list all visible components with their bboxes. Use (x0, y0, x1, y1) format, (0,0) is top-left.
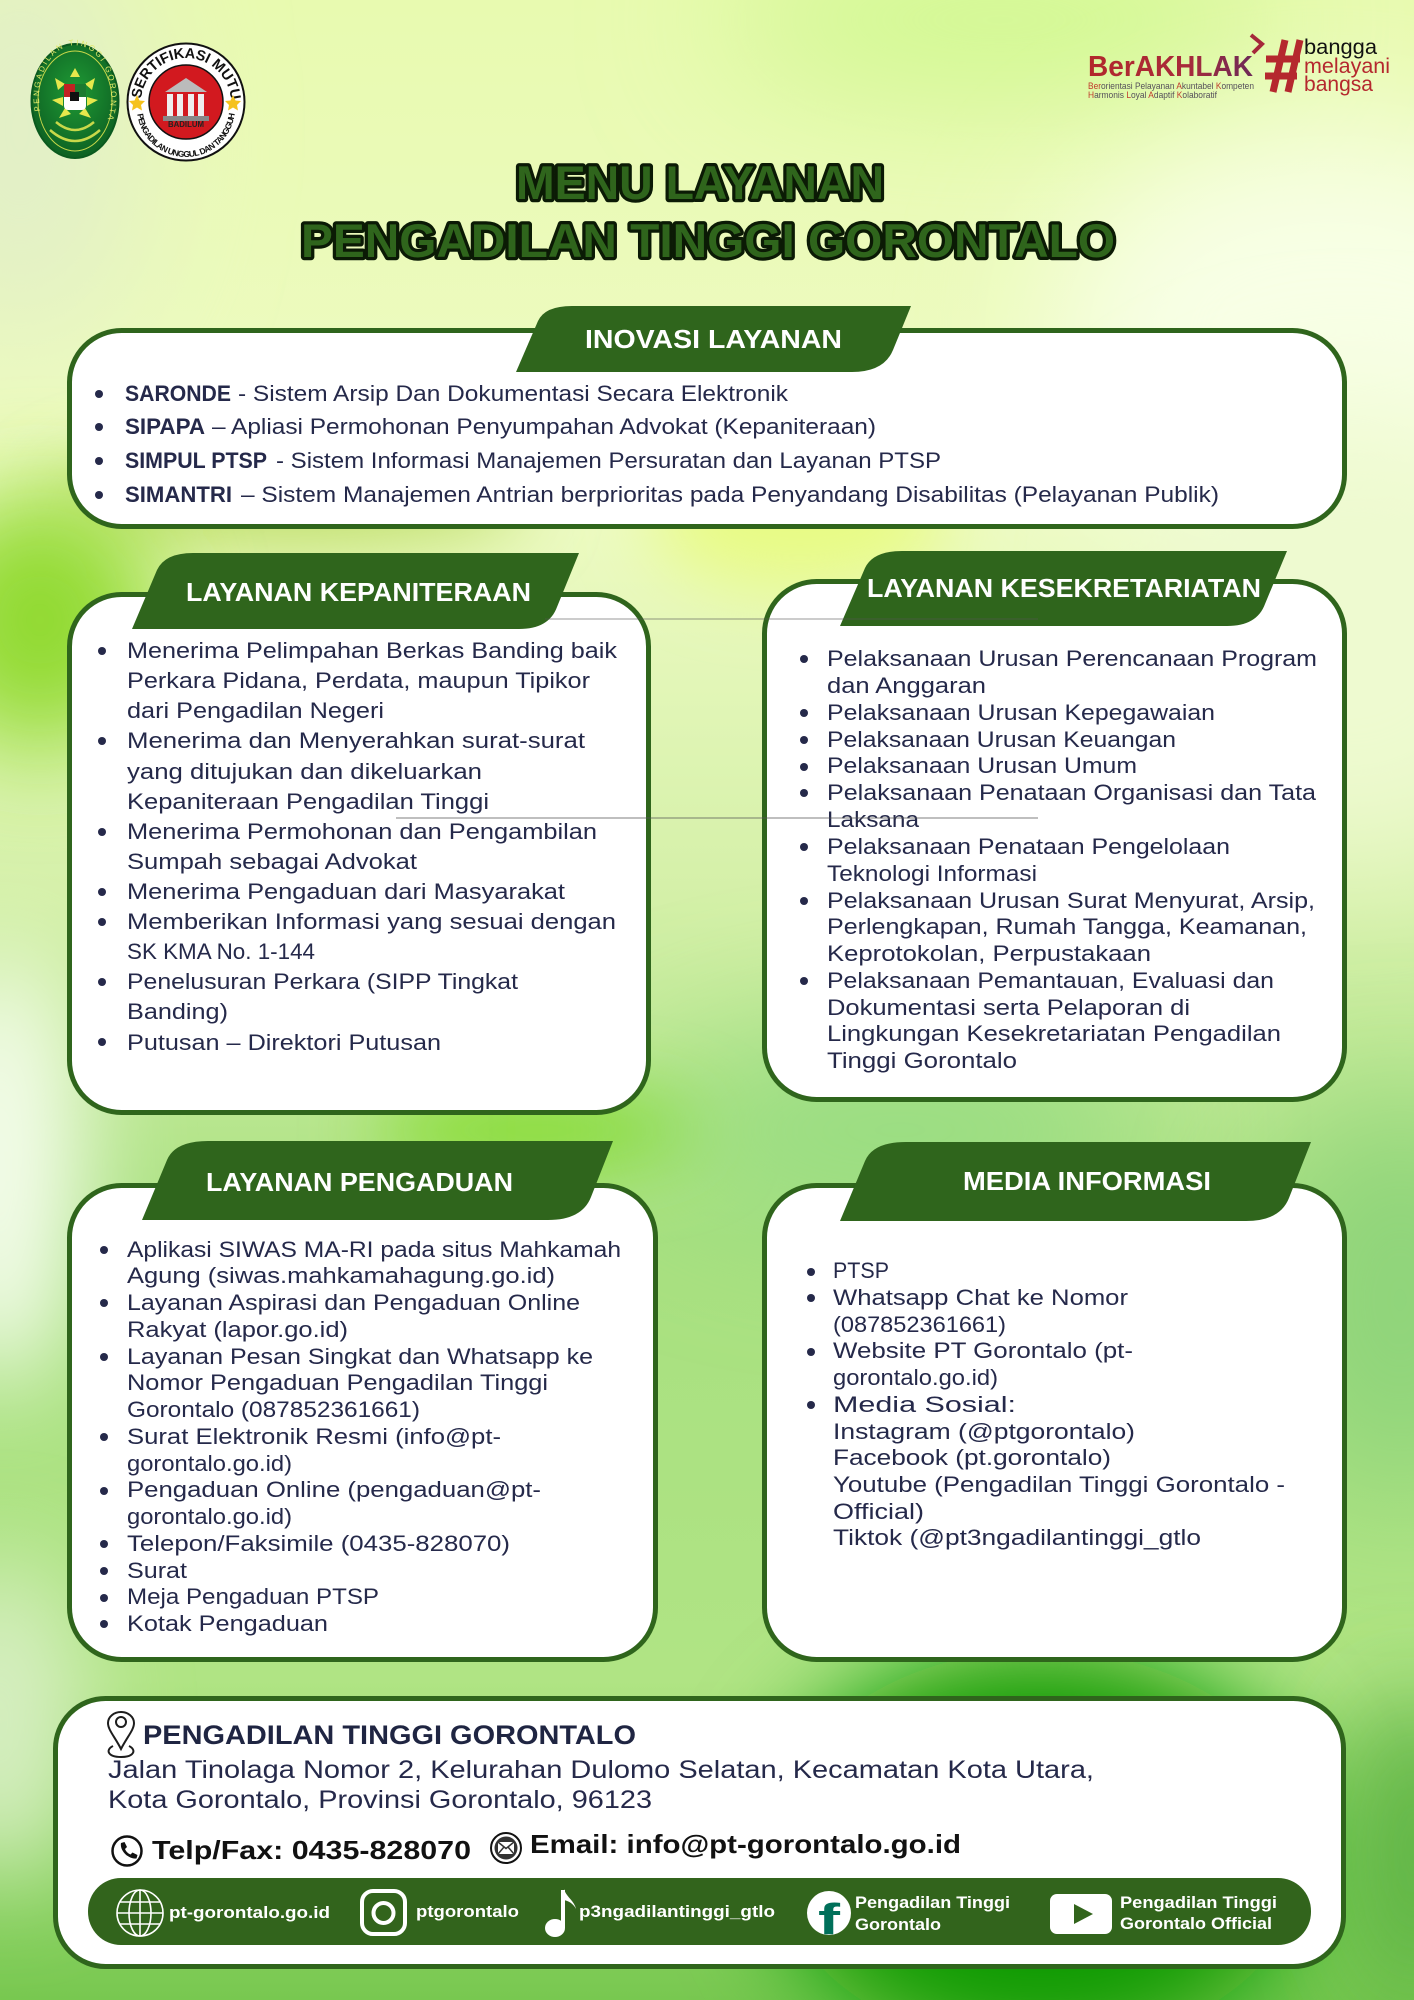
label: facebook (855, 1893, 1010, 1934)
title (301, 156, 1115, 267)
title: MENU LAYANAN (516, 156, 884, 209)
panel: contact footer (56, 1698, 1344, 1966)
list: pengaduan items: gorontalo.go.id) (127, 1504, 292, 1529)
icon: facebook: f (818, 1895, 841, 1944)
logo: Sertifikasi Mutu badge: PENGADILAN UNGGUL DAN TANGGUH (137, 113, 235, 157)
list: kepaniteraan items: Menerima Permohonan dan Pengambilan (127, 819, 597, 844)
logo: Sertifikasi Mutu badge (126, 42, 246, 162)
list: inovasi items: SARONDE (125, 381, 231, 406)
icon: location pin (108, 1712, 134, 1757)
label: youtube: Gorontalo Official (1120, 1914, 1272, 1933)
logo: Pengadilan Tinggi Gorontalo emblem (30, 40, 120, 159)
list: pengaduan items: Nomor Pengaduan Pengadilan Tinggi (127, 1370, 548, 1395)
list: pengaduan items: Agung (siwas.mahkamahagung.go.id) (127, 1263, 555, 1288)
text: address (108, 1756, 1094, 1814)
list: kepaniteraan items: Kepaniteraan Pengadilan Tinggi (127, 789, 489, 814)
tab: layanan kepaniteraan heading (132, 553, 579, 629)
list: pengaduan items: Layanan Pesan Singkat dan Whatsapp ke (127, 1344, 593, 1369)
list: kepaniteraan items: Penelusuran Perkara (SIPP Tingkat (127, 969, 519, 994)
list: kesekretariatan items: Pelaksanaan Urusan Kepegawaian (827, 700, 1215, 725)
icon: email (491, 1833, 521, 1863)
list: pengaduan items: Kotak Pengaduan (127, 1611, 328, 1636)
list: inovasi items: – Sistem Manajemen Antrian berprioritas pada Penyandang Disabilitas (Pelayanan Publik) (241, 482, 1219, 507)
logo: BerAKHLAK bangga melayani bangsa: melayani (1304, 55, 1390, 78)
list: kepaniteraan items: Sumpah sebagai Advokat (127, 849, 418, 874)
logo: BerAKHLAK bangga melayani bangsa: Berorientasi Pelayanan Akuntabel Kompeten (1088, 81, 1254, 92)
list: kepaniteraan items: Banding) (127, 999, 228, 1024)
list: kesekretariatan items: dan Anggaran (827, 673, 986, 698)
list: kepaniteraan items: dari Pengadilan Negeri (127, 698, 384, 723)
list: inovasi items: SIMPUL PTSP (125, 448, 267, 473)
label: tiktok: p3ngadilantinggi_gtlo (579, 1902, 775, 1921)
list: kesekretariatan items: Pelaksanaan Urusan Perencanaan Program (827, 646, 1317, 671)
list: media informasi items: Official) (833, 1499, 924, 1524)
list: pengaduan items (100, 1237, 621, 1636)
panel: layanan pengaduan (70, 1141, 656, 1660)
list: kesekretariatan items: Pelaksanaan Pemantauan, Evaluasi dan (827, 968, 1274, 993)
list: kepaniteraan items: Memberikan Informasi yang sesuai dengan (127, 909, 616, 934)
list: kepaniteraan items: SK KMA No. 1-144 (127, 939, 315, 964)
tab: layanan kepaniteraan heading: LAYANAN KEPANITERAAN (186, 579, 531, 607)
list: kesekretariatan items: Pelaksanaan Penataan Pengelolaan (827, 834, 1230, 859)
list: kesekretariatan items: Dokumentasi serta Pelaporan di (827, 995, 1190, 1020)
list: kepaniteraan items: Perkara Pidana, Perdata, maupun Tipikor (127, 668, 591, 693)
list: inovasi items: SIPAPA (125, 414, 205, 439)
list: kepaniteraan items: Putusan – Direktori Putusan (127, 1030, 441, 1055)
logo: BerAKHLAK bangga melayani bangsa: bangga (1304, 36, 1377, 59)
list: kesekretariatan items: Perlengkapan, Rumah Tangga, Keamanan, (827, 914, 1307, 939)
icon: instagram (362, 1891, 405, 1934)
list: pengaduan items: Telepon/Faksimile (0435-828070) (127, 1531, 510, 1556)
logo: BerAKHLAK bangga melayani bangsa: Harmonis Loyal Adaptif Kolaboratif (1088, 90, 1217, 101)
icon: facebook (807, 1891, 851, 1944)
list: inovasi items: SIMANTRI (125, 482, 232, 507)
logo: BerAKHLAK bangga melayani bangsa: BerAKHLAK (1088, 51, 1253, 83)
panel: layanan kepaniteraan (70, 553, 648, 1112)
list: kesekretariatan items: Laksana (827, 807, 920, 832)
list: media informasi items: Whatsapp Chat ke Nomor (833, 1285, 1129, 1310)
panel: media informasi (764, 1142, 1344, 1660)
logo: BerAKHLAK bangga melayani bangsa (1088, 35, 1390, 101)
icon: phone (112, 1836, 142, 1866)
list: media informasi items: Website PT Gorontalo (pt- (833, 1338, 1133, 1363)
text: address: Jalan Tinolaga Nomor 2, Kelurahan Dulomo Selatan, Kecamatan Kota Utara, (108, 1756, 1094, 1784)
list: inovasi items: - Sistem Arsip Dan Dokumentasi Secara Elektronik (238, 381, 789, 406)
icon: tiktok note (545, 1889, 576, 1937)
list: pengaduan items: Pengaduan Online (pengaduan@pt- (127, 1477, 541, 1502)
list: pengaduan items: gorontalo.go.id) (127, 1451, 292, 1476)
logo: Sertifikasi Mutu badge: BADILUM (168, 120, 204, 129)
list: media informasi items (807, 1258, 1285, 1550)
list: kepaniteraan items: Menerima Pengaduan dari Masyarakat (127, 879, 566, 904)
list: media informasi items: Tiktok (@pt3ngadilantinggi_gtlo (833, 1525, 1201, 1550)
list: media informasi items: Youtube (Pengadilan Tinggi Gorontalo - (833, 1472, 1285, 1497)
text: email: Email: info@pt-gorontalo.go.id (530, 1829, 961, 1859)
social media bar (88, 1878, 1311, 1945)
panel: layanan kesekretariatan (764, 551, 1344, 1100)
list: pengaduan items: Surat (127, 1558, 188, 1583)
label: youtube (1120, 1893, 1277, 1933)
list: media informasi items: Instagram (@ptgorontalo) (833, 1419, 1135, 1444)
logo: BerAKHLAK bangga melayani bangsa: bangsa (1304, 73, 1373, 96)
list: media informasi items: Media Sosial: (833, 1392, 1016, 1417)
list: kesekretariatan items: Pelaksanaan Penataan Organisasi dan Tata (827, 780, 1317, 805)
list: kesekretariatan items: Pelaksanaan Urusan Umum (827, 753, 1137, 778)
list: kesekretariatan items: Keprotokolan, Perpustakaan (827, 941, 1151, 966)
tab: layanan kesekretariatan heading: LAYANAN KESEKRETARIATAN (867, 575, 1261, 603)
icon: globe (117, 1890, 163, 1936)
list: media informasi items: PTSP (833, 1258, 889, 1283)
list: kesekretariatan items: Tinggi Gorontalo (827, 1048, 1017, 1073)
list: inovasi items: – Apliasi Permohonan Penyumpahan Advokat (Kepaniteraan) (212, 414, 876, 439)
list: kepaniteraan items: Menerima dan Menyerahkan surat-surat (127, 728, 586, 753)
tab: inovasi layanan heading (516, 306, 911, 372)
list: pengaduan items: Surat Elektronik Resmi (info@pt- (127, 1424, 501, 1449)
list: pengaduan items: Rakyat (lapor.go.id) (127, 1317, 348, 1342)
list: inovasi items (95, 381, 1219, 507)
icon: youtube (1050, 1894, 1112, 1934)
list: media informasi items: gorontalo.go.id) (833, 1365, 998, 1390)
tab: media informasi heading: MEDIA INFORMASI (963, 1168, 1211, 1196)
panel: inovasi layanan (70, 306, 1344, 526)
label: facebook: Gorontalo (855, 1915, 941, 1934)
list: pengaduan items: Aplikasi SIWAS MA-RI pada situs Mahkamah (127, 1237, 621, 1262)
text: address: Kota Gorontalo, Provinsi Gorontalo, 96123 (108, 1786, 652, 1814)
list: pengaduan items: Meja Pengaduan PTSP (127, 1584, 379, 1609)
label: website: pt-gorontalo.go.id (169, 1903, 330, 1922)
list: media informasi items: Facebook (pt.gorontalo) (833, 1445, 1111, 1470)
heading: court name: PENGADILAN TINGGI GORONTALO (143, 1720, 636, 1750)
list: kesekretariatan items (800, 646, 1317, 1073)
tab: media informasi heading (840, 1142, 1311, 1221)
list: kepaniteraan items: yang ditujukan dan dikeluarkan (127, 759, 482, 784)
tab: inovasi layanan heading: INOVASI LAYANAN (585, 326, 842, 354)
list: pengaduan items: Gorontalo (087852361661) (127, 1397, 420, 1422)
logo: Sertifikasi Mutu badge: SERTIFIKASI MUTU (132, 48, 241, 99)
list: kepaniteraan items (98, 638, 618, 1055)
list: kesekretariatan items: Lingkungan Kesekretariatan Pengadilan (827, 1021, 1281, 1046)
label: instagram: ptgorontalo (416, 1902, 519, 1921)
title: PENGADILAN TINGGI GORONTALO (301, 214, 1115, 267)
label: youtube: Pengadilan Tinggi (1120, 1893, 1277, 1912)
label: facebook: Pengadilan Tinggi (855, 1893, 1010, 1912)
tab: layanan pengaduan heading: LAYANAN PENGADUAN (206, 1169, 513, 1197)
list: kesekretariatan items: Pelaksanaan Urusan Surat Menyurat, Arsip, (827, 888, 1315, 913)
list: kepaniteraan items: Menerima Pelimpahan Berkas Banding baik (127, 638, 618, 663)
list: media informasi items: (087852361661) (833, 1312, 1006, 1337)
list: inovasi items: - Sistem Informasi Manajemen Persuratan dan Layanan PTSP (276, 448, 941, 473)
list: kesekretariatan items: Teknologi Informasi (827, 861, 1037, 886)
list: kesekretariatan items: Pelaksanaan Urusan Keuangan (827, 727, 1176, 752)
text: telp fax: Telp/Fax: 0435-828070 (152, 1835, 471, 1865)
tab: layanan kesekretariatan heading (840, 551, 1287, 626)
tab: layanan pengaduan heading (142, 1141, 613, 1220)
list: pengaduan items: Layanan Aspirasi dan Pengaduan Online (127, 1290, 580, 1315)
